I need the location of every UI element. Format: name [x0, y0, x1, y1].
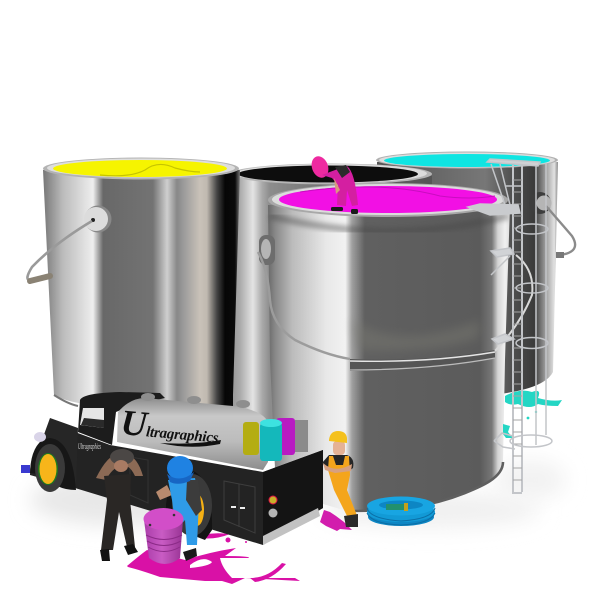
tail lights: [269, 496, 277, 504]
paint can: yellow: [27, 158, 240, 410]
tool box doors: [224, 481, 255, 533]
can handle: [529, 192, 575, 258]
mini barrels: [243, 418, 308, 461]
worker: pink on rim: [309, 154, 358, 214]
can handle: [258, 235, 532, 359]
top platform: [468, 159, 540, 215]
paint can: black: [230, 164, 432, 420]
magenta splash: near yellow worker: [320, 510, 352, 531]
magenta splash: main: [127, 533, 300, 584]
truck body: [75, 432, 323, 545]
mid platforms: [491, 248, 514, 257]
rear wheel: [166, 470, 212, 540]
paint can: cyan: [376, 152, 575, 395]
cyan paint: [384, 154, 550, 167]
cyan splatter on can: [503, 391, 562, 438]
tanker truck: [21, 392, 323, 545]
logo on tank: Ultragraphics: [119, 402, 221, 451]
worker: distressed black overalls: [96, 449, 143, 561]
black paint: [238, 166, 418, 182]
front wheel: [35, 444, 65, 492]
floor shadows: [30, 460, 566, 528]
magenta paint: [279, 186, 497, 213]
bowl reflection: [352, 320, 480, 350]
tank: [117, 398, 268, 470]
hood and fender: [30, 418, 78, 488]
yellow paint: [53, 160, 227, 177]
worker: yellow overalls: [322, 431, 358, 527]
can handle: [27, 206, 111, 281]
seam band: [350, 350, 495, 371]
drum: purple: [144, 508, 184, 564]
logo on door: Ultragraphics: [78, 442, 101, 451]
coiled blue hose: [367, 496, 435, 526]
front headlights: [34, 432, 46, 442]
cab: [78, 392, 165, 445]
ladder with safety cage: [468, 159, 552, 493]
worker: blue overalls: [156, 456, 202, 561]
paint can: magenta front: [258, 183, 532, 512]
